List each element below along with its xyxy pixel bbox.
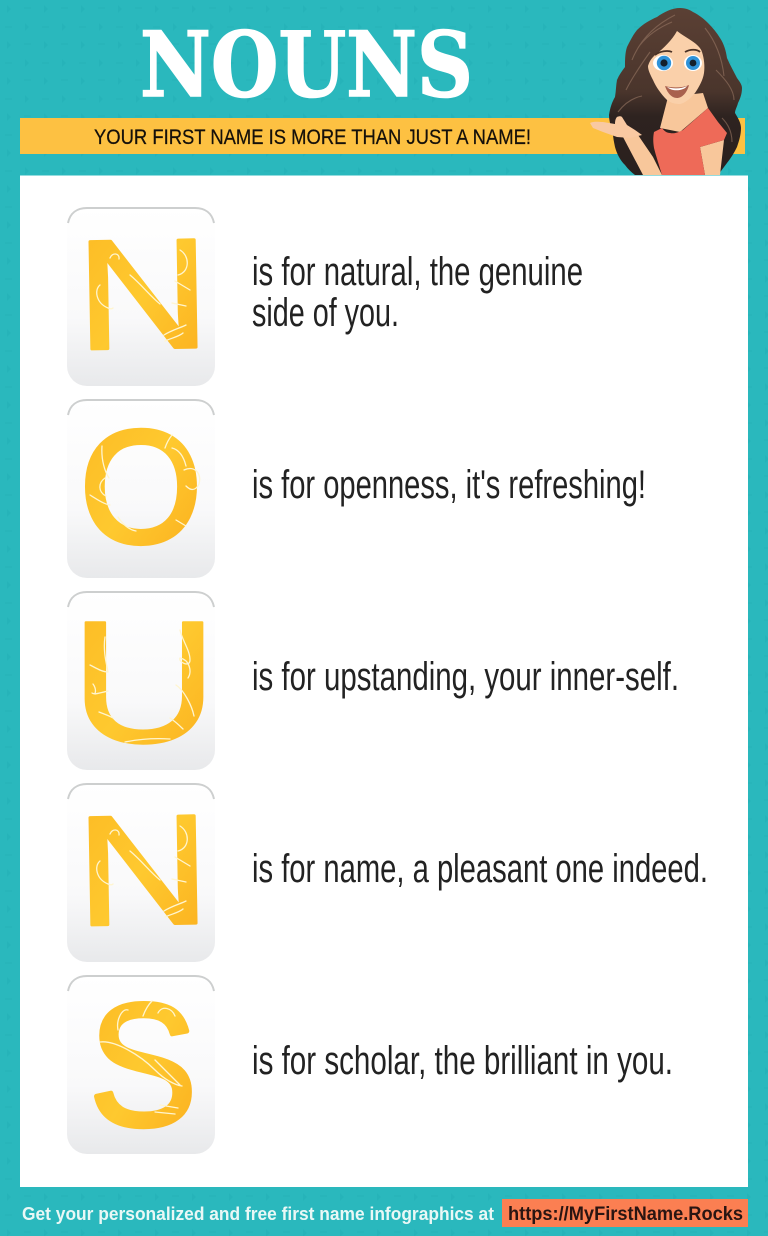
footer call to action: Get your personalized and free first name infographics at [22,1204,494,1224]
tile N: N [74,207,212,383]
row 3: U [67,584,679,779]
description 1: is for natural, the genuine [252,250,583,294]
subtitle banner: YOUR FIRST NAME IS MORE THAN JUST A NAME! [94,126,531,149]
illustration: woman character [590,8,742,175]
main white panel [20,176,748,1187]
shirt [653,108,727,175]
eyes [653,50,702,71]
subtitle banner [20,118,745,154]
title: NOUNS [140,12,473,118]
hair strands [618,15,734,142]
arm and neck skin [623,93,724,175]
description 1: side of you. [252,291,399,335]
tile O: O [80,397,202,576]
tile N: N [74,783,212,959]
footer url badge: https://MyFirstName.Rocks [508,1204,743,1225]
row 1: N [67,207,583,386]
row 5: S [67,967,673,1162]
row 4: N [67,783,708,962]
hand [590,116,642,138]
hair [609,8,742,175]
tile S: S [89,967,197,1162]
row 2: O [67,397,646,578]
tile U: U [70,584,218,779]
smile [665,85,689,98]
face [648,31,704,104]
